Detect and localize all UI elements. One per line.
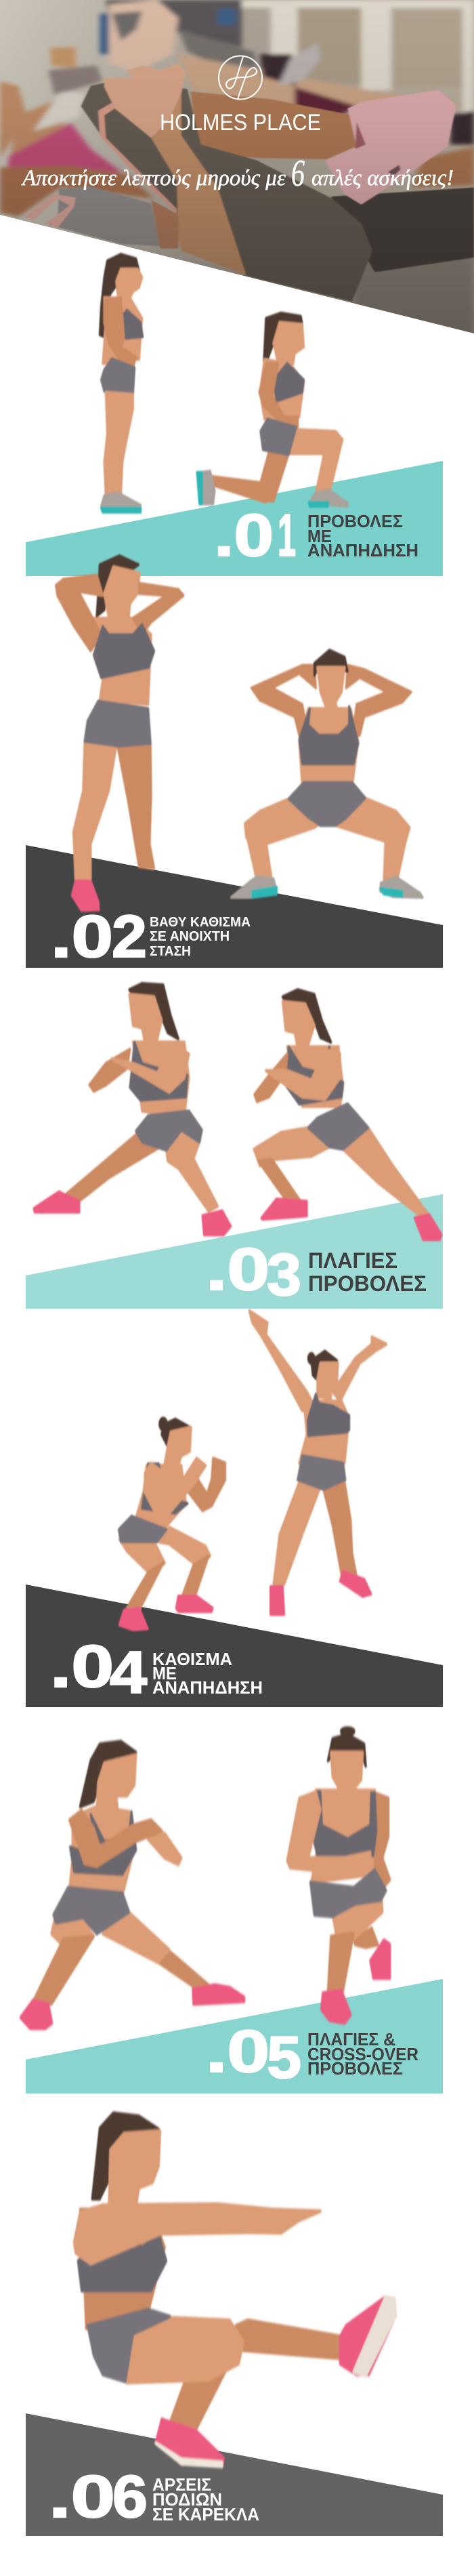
number .01: .0 (214, 502, 274, 569)
pink sneaker (325, 90, 456, 205)
number .06: .0 (49, 2463, 115, 2530)
number .02: .0 (51, 903, 113, 970)
figure: wide squat (231, 650, 423, 897)
teal band 05 (26, 1979, 443, 2093)
thigh (81, 78, 372, 302)
dark band 04 (26, 1585, 443, 1707)
label 04: ΜΕ (152, 1663, 177, 1683)
label 05: ΠΛΑΓΙΕΣ & (307, 2029, 395, 2049)
label 06 (152, 2474, 259, 2524)
panel: exercise 05 (20, 1728, 443, 2093)
label 04: ΚΑΘΙΣΜΑ (152, 1649, 232, 1669)
label 04 (152, 1649, 263, 1698)
number .04 (50, 1633, 147, 1706)
shin (190, 91, 358, 159)
number .04: 4 (110, 1639, 147, 1706)
figure: side lunge left (34, 983, 231, 1235)
tagline: απλές ασκήσεις! (311, 166, 454, 190)
number .06: 6 (112, 2463, 148, 2530)
label 06: ΣΕ ΚΑΡΕΚΛΑ (152, 2504, 259, 2524)
hands (104, 63, 186, 138)
grey hair and strap (58, 186, 160, 246)
number .03: 3 (267, 1241, 301, 1308)
label 03: ΠΛΑΓΙΕΣ (308, 1248, 397, 1273)
number .03: .0 (206, 1235, 270, 1303)
number .01 (214, 502, 296, 569)
label 02 (150, 915, 251, 959)
figure: cross-over lunge (287, 1728, 390, 2023)
label 06: ΠΟΔΙΩΝ (152, 2489, 222, 2510)
logo wordmark: HOLMES PLACE (160, 110, 321, 136)
teal band 01 (26, 461, 443, 576)
label 03: ΠΡΟΒΟΛΕΣ (308, 1271, 427, 1296)
figure: side lunge (20, 1742, 244, 2028)
number .06 (49, 2463, 148, 2530)
label 04: ΑΝΑΠΗΔΗΣΗ (152, 1677, 263, 1698)
label 05: ΠΡΟΒΟΛΕΣ (307, 2058, 403, 2079)
panel: exercise 06 (26, 2113, 443, 2536)
pink stripe (98, 103, 177, 213)
arm (115, 90, 246, 276)
panel: exercise 02 (26, 556, 443, 970)
label 01 (307, 511, 418, 560)
number .05: 5 (267, 2024, 301, 2091)
label 02: ΣΤΑΣΗ (150, 944, 191, 959)
tagline: 6 (291, 152, 305, 195)
label 02: ΣΕ ΑΝΟΙΧΤΗ (150, 929, 230, 944)
grey band 06 (26, 2413, 443, 2536)
logo: Holmes Place (160, 56, 321, 136)
number .03 (206, 1235, 301, 1308)
logo emblem (219, 56, 262, 99)
number .01: 1 (278, 502, 296, 569)
panel: exercise 04 (26, 1311, 443, 1707)
teal band 03 (26, 1194, 443, 1309)
header photo: stretching woman (0, 0, 474, 339)
number .05 (206, 2018, 301, 2091)
label 01: ΑΝΑΠΗΔΗΣΗ (307, 540, 418, 560)
label 01: ΜΕ (307, 526, 332, 546)
figure: lunge (197, 313, 347, 506)
white diagonal page cut (0, 215, 474, 352)
number .02: 2 (112, 903, 147, 970)
label 03 (308, 1248, 427, 1296)
figure: chair leg raise (74, 2113, 396, 2466)
figure: jump arms raised (249, 1311, 386, 1614)
legging hips (331, 188, 474, 272)
dark band 02 (26, 845, 443, 968)
figure: standing side view (100, 254, 143, 512)
panel: exercise 03 (26, 983, 443, 1309)
label 02: ΒΑΘΥ ΚΑΘΙΣΜΑ (150, 915, 251, 930)
panel: exercise 01 (26, 254, 443, 576)
label 01: ΠΡΟΒΟΛΕΣ (307, 511, 403, 531)
tagline: Αποκτήστε λεπτούς μηρούς με (21, 166, 286, 190)
label 06: ΑΡΣΕΙΣ (152, 2474, 211, 2495)
tagline (21, 152, 454, 195)
figure: squat (118, 1418, 225, 1629)
number .05: .0 (206, 2018, 270, 2085)
label 05: CROSS-OVER (307, 2044, 418, 2064)
label 05 (307, 2029, 418, 2079)
figure: side lunge right (254, 990, 441, 1240)
number .02 (51, 903, 147, 970)
figure: standing hands behind head (56, 556, 184, 911)
number .04: .0 (50, 1633, 114, 1700)
